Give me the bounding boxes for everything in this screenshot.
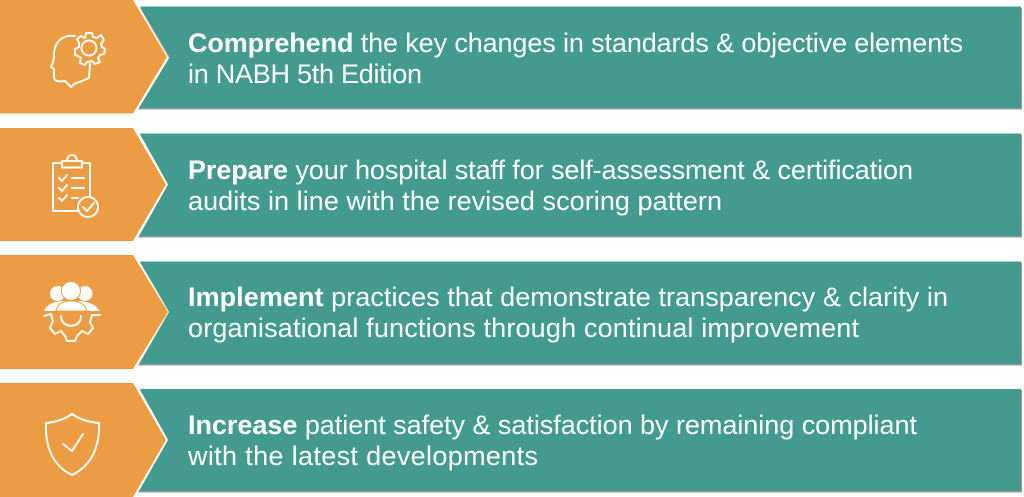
- text 4: with the latest developments: [187, 441, 538, 471]
- row 3: implement: [0, 255, 1022, 369]
- text 3: organisational functions through continual improvement: [188, 313, 859, 343]
- teal banner 2: [138, 134, 1022, 238]
- text 3: [188, 282, 948, 343]
- text 3: Implement practices that demonstrate transparency & clarity in: [188, 282, 948, 312]
- icon: team and gear: [44, 282, 100, 341]
- orange arrow 2: [0, 128, 166, 241]
- text 1: in NABH 5th Edition: [188, 59, 422, 89]
- text 2: Prepare your hospital staff for self-assessment & certification: [188, 155, 913, 185]
- text 2: audits in line with the revised scoring pattern: [188, 186, 722, 216]
- teal banner 4: [138, 389, 1022, 492]
- icon: clipboard checklist: [53, 155, 98, 217]
- teal banner 1: [138, 6, 1022, 110]
- text 1: Comprehend the key changes in standards & objective elements: [188, 28, 963, 58]
- row 4: increase: [0, 383, 1022, 497]
- teal banner 3: [138, 262, 1022, 366]
- orange arrow 1: [0, 0, 167, 114]
- row 1: comprehend: [0, 0, 1022, 114]
- text 1: [188, 28, 963, 89]
- orange arrow 4: [0, 383, 166, 497]
- text 4: Increase patient safety & satisfaction by remaining compliant: [188, 410, 917, 440]
- icon: shield with check: [46, 414, 99, 475]
- icon: head with gear: [51, 33, 105, 87]
- text 4: [187, 410, 917, 471]
- text 2: [188, 155, 913, 216]
- row 2: prepare: [0, 128, 1022, 241]
- orange arrow 3: [0, 255, 168, 369]
